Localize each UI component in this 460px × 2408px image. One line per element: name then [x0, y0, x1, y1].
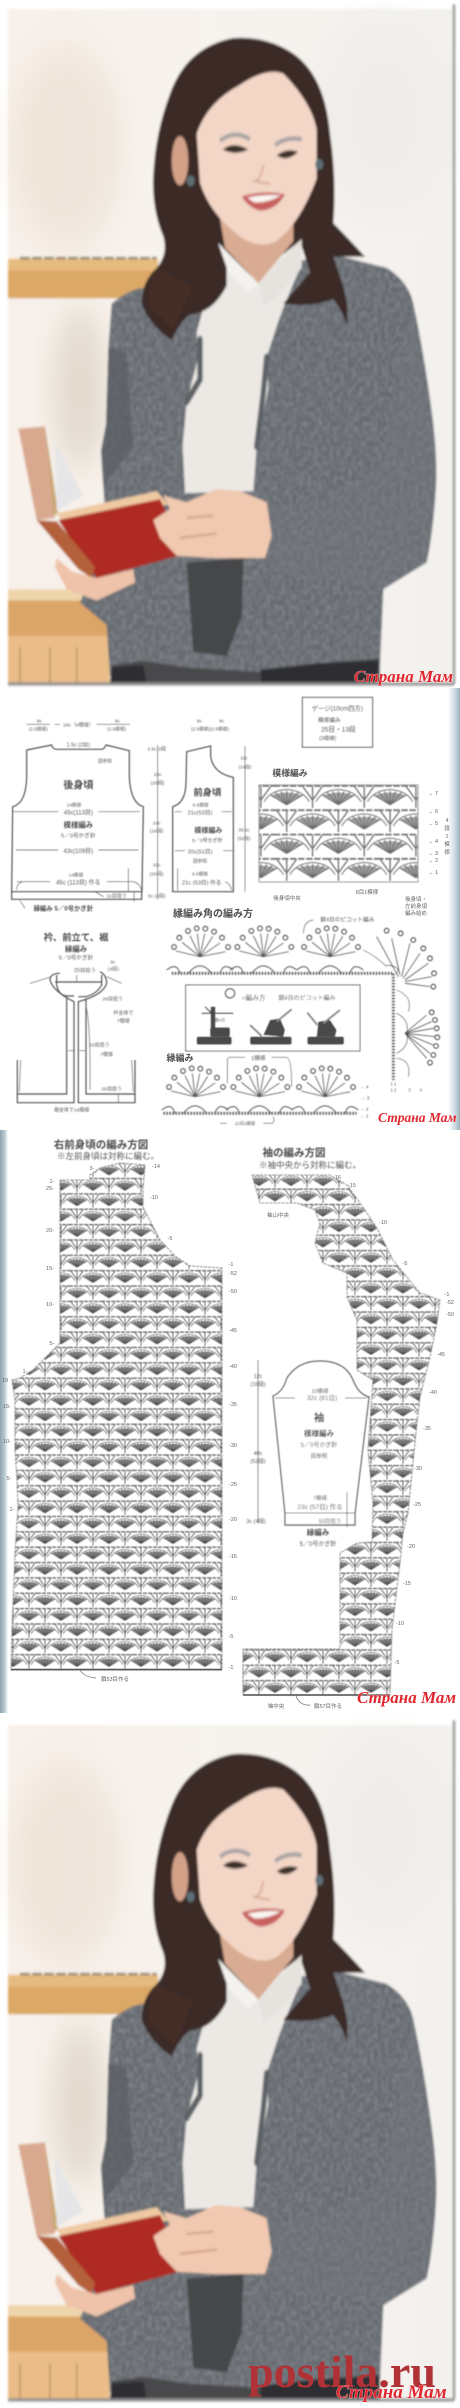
schematic: back body piece: (2.5模様): [29, 726, 48, 733]
stitch chart: edging: 1模様: [251, 1054, 266, 1062]
row numbers: right front body: -5: [168, 1236, 172, 1242]
stitch chart: pattern stitch sample: 様: [444, 848, 450, 856]
schematic: front body piece: 図参照: [193, 857, 207, 864]
stitch chart: edging corner: [167, 916, 440, 1092]
schematic: sleeve: (52段): [250, 1457, 266, 1465]
dimension column: front height: 11c: [240, 755, 248, 760]
watermark: postila logo: postila.ru: [248, 2346, 436, 2397]
schematic: sleeve: 縁編み: [307, 1527, 330, 1537]
schematic: back body piece: 19c（6模様）: [63, 722, 94, 729]
dimension column: front height: 39.5c: [238, 828, 250, 833]
gauge box: ゲージ(10cm四方): [312, 704, 363, 713]
stitch chart: edging corner: 3: [408, 1087, 411, 1092]
dimension column: body height: 2.5c 3段: [147, 746, 166, 753]
gauge box: (3模様): [319, 734, 336, 742]
stitch chart: pattern stitch sample: 後身頃・: [405, 895, 427, 903]
schematic: sleeve: 32c (81目): [307, 1394, 337, 1402]
schematic: front body piece: 8c: [197, 719, 202, 724]
heading: sleeve chart: 袖の編み方図: [262, 1146, 326, 1159]
row numbers: right front body: 10-: [46, 1302, 54, 1308]
stitch chart: pattern stitch sample: 編み始め: [405, 909, 427, 917]
schematic: back body piece: 45c(113目): [64, 809, 93, 816]
schematic: sleeve: 図参照: [311, 1452, 328, 1460]
row numbers: right front body: 5-: [50, 1341, 55, 1347]
schematic: back body piece: 11目拾う: [107, 893, 127, 900]
row numbers: right front body: 20-: [46, 1228, 54, 1234]
schematic: front body piece: [173, 719, 233, 892]
schematic: collar, front band and hem: 衿、前立て、裾: [44, 932, 109, 943]
stitch chart: sleeve: [243, 1175, 454, 1710]
stitch chart: pattern stitch sample: → 1: [428, 870, 438, 876]
schematic: collar, front band and hem: 29目拾う: [102, 996, 123, 1003]
row numbers: right front body: 25-: [46, 1186, 54, 1192]
stitch chart: pattern stitch sample: 段: [444, 824, 450, 832]
schematic: sleeve: [246, 1360, 369, 1548]
row numbers: sleeve: -10: [396, 1621, 404, 1627]
dimension column: front height: [238, 746, 252, 892]
row numbers: sleeve: -15: [348, 1183, 356, 1189]
row numbers: sleeve: -5: [403, 1261, 407, 1267]
icon: hook step one: [197, 1007, 233, 1045]
schematic: collar, front band and hem: 裾全体で18模様: [54, 1106, 89, 1113]
stitch chart: pattern stitch sample: → 4: [428, 839, 438, 845]
legend box: picot how-to: =編み方: [242, 993, 266, 1002]
dimension column: body height: 19c: [154, 772, 162, 778]
dimension column: front height: (52段): [238, 835, 251, 842]
stitch chart: edging corner: 鎖4目のピコット編み: [320, 916, 375, 924]
schematic: back body piece: 後身頃: [63, 778, 93, 791]
dimension column: body height: 15c: [153, 863, 161, 869]
schematic: sleeve: 23c (57目) 作る: [297, 1502, 343, 1511]
row numbers: right front body: -30: [229, 1443, 237, 1449]
row numbers: right front body: 5-: [7, 1476, 12, 1482]
schematic: front body piece: 前身頃: [193, 787, 222, 798]
stitch chart: sleeve: 袖山中央: [267, 1211, 289, 1219]
stitch chart: pattern stitch sample: → 7: [428, 791, 438, 797]
dimension column: body height: (20段): [150, 870, 164, 877]
stitch chart: edging: [162, 1054, 370, 1127]
stitch chart: edging corner: 4: [419, 1087, 422, 1092]
schematic: back body piece: 14模様: [69, 872, 84, 879]
row numbers: sleeve: -30: [414, 1466, 422, 1472]
schematic: back body piece: 14模様: [67, 802, 82, 809]
schematic: collar, front band and hem: 25目拾う: [101, 1085, 122, 1092]
dimension column: body height: (18段): [150, 828, 164, 835]
stitch chart: pattern stitch sample: 後身頃中央: [273, 894, 301, 902]
dimension column: body height: [147, 745, 166, 899]
stitch chart: edging corner: 1 2: [390, 1087, 397, 1092]
schematic: collar, front band and hem: 7模様: [100, 1051, 113, 1058]
heading: edging corner: 縁編み角の編み方: [173, 907, 253, 920]
row numbers: right front body: -5: [229, 1634, 233, 1640]
schematic: collar, front band and hem: 3c: [110, 959, 116, 965]
stitch chart: edging: → 1: [359, 1113, 369, 1119]
row numbers: sleeve: -15: [403, 1581, 411, 1587]
schematic: front body piece: 6.5模様: [193, 802, 209, 809]
photo: woman in grey crochet jacket reading a book: [8, 4, 454, 684]
schematic: collar, front band and hem: 25目拾う: [74, 966, 96, 974]
schematic: back body piece: 43c(109目): [64, 848, 93, 855]
heading: right front chart: [54, 1138, 159, 1161]
schematic: sleeve: 10模様: [311, 1387, 329, 1395]
stitch chart: sleeve: 鎖57目作る: [314, 1702, 342, 1710]
stitch chart: pattern stitch sample: 8目1模様: [356, 888, 379, 896]
schematic: front body piece: 21c (53目) 作る: [182, 879, 221, 887]
schematic: back body piece: 1.5c (2目): [67, 742, 90, 749]
icon: hook step three: [307, 1010, 344, 1045]
row numbers: sleeve: -1: [445, 1292, 449, 1298]
side shadow: left page edge: [0, 1130, 8, 1713]
row numbers: right front body: [2, 1164, 237, 1671]
row numbers: right front body: -25: [229, 1482, 237, 1488]
dimension column: body height: (25段): [151, 780, 165, 787]
stitch chart: pattern stitch sample: 左前身頃: [405, 902, 427, 910]
heading: right front chart: 右前身頃の編み方図: [54, 1138, 148, 1151]
row numbers: right front body: -14: [152, 1164, 160, 1170]
schematic: sleeve: 袖: [314, 1411, 324, 1424]
icon: hook step two: [250, 1009, 292, 1045]
schematic: back body piece: 図参照: [98, 758, 112, 765]
schematic: sleeve: 5／0号かぎ針: [301, 1441, 337, 1449]
row numbers: sleeve: -16: [333, 1175, 341, 1181]
stitch chart: edging: → 3: [360, 1095, 370, 1101]
row numbers: sleeve: -50: [446, 1312, 454, 1318]
schematic: collar, front band and hem: [17, 932, 135, 1113]
row numbers: right front body: -40: [229, 1364, 237, 1370]
stitch chart: pattern stitch sample: [259, 785, 450, 917]
schematic: front body piece: 6.5模様: [192, 870, 208, 877]
row numbers: sleeve: -5: [395, 1660, 399, 1666]
row numbers: right front body: -35: [229, 1402, 237, 1408]
row numbers: sleeve: -25: [413, 1502, 421, 1508]
row numbers: sleeve: -20: [407, 1544, 415, 1550]
stitch chart: sleeve: 袖中央: [268, 1702, 285, 1710]
schematic: collar, front band and hem: 縁編み: [65, 944, 88, 953]
row numbers: right front body: -10: [150, 1195, 158, 1201]
heading: pattern stitch: 模様編み: [272, 767, 308, 778]
watermark: diagram page: Страна Мам: [378, 1110, 457, 1125]
row numbers: right front body: -52: [229, 1271, 237, 1277]
watermark: top photo: Страна Мам: [354, 667, 453, 686]
gauge box: 25目・13段: [321, 724, 356, 733]
dimension column: body height: 14c: [153, 821, 161, 827]
stitch chart: pattern stitch sample: → 3: [428, 851, 438, 857]
stitch chart: pattern stitch sample: 1: [445, 834, 449, 840]
schematic: sleeve: 40c: [254, 1451, 263, 1457]
legend box: picot how-to: 鎖4目: [215, 1016, 225, 1022]
schematic: front body piece: 20c(51目): [188, 848, 213, 855]
row numbers: right front body: -45: [229, 1328, 237, 1334]
schematic: back body piece: 縁編み 5／0号かぎ針: [34, 904, 94, 913]
schematic: front body piece: 5／0号かぎ針: [192, 837, 223, 844]
stitch chart: edging: → 4: [359, 1084, 369, 1090]
schematic: back body piece: 模様編み: [64, 820, 94, 829]
schematic: collar, front band and hem: 5／0号かぎ針: [59, 953, 94, 961]
schematic: sleeve: 3c (4段): [246, 1517, 266, 1525]
stitch chart: edging: 12目1模様: [235, 1120, 256, 1127]
schematic: front body piece: 模様編み: [194, 825, 222, 834]
schematic: front body piece: 21c(53目): [188, 809, 213, 816]
side shadow: right page edge: [448, 688, 460, 1130]
row numbers: right front body: 19: [2, 1378, 8, 1384]
schematic: front body piece: 8c: [219, 719, 225, 724]
row numbers: right front body: 15-: [46, 1266, 54, 1272]
stitch chart: edging corner: 1 1: [390, 1082, 397, 1087]
watermark: bottom photo: Страна Мам: [336, 2382, 447, 2403]
schematic: sleeve: 7模様: [313, 1494, 328, 1502]
schematic: collar, front band and hem: 衿全体で: [113, 1009, 133, 1016]
schematic: sleeve: 5／0号かぎ針: [300, 1540, 336, 1548]
schematic: back body piece: [12, 719, 143, 913]
row numbers: sleeve: -35: [423, 1426, 431, 1432]
row numbers: right front body: -15: [229, 1554, 237, 1560]
row numbers: right front body: 10-: [3, 1439, 11, 1445]
schematic: back body piece: 5／0号かぎ針: [61, 832, 96, 840]
schematic: sleeve: 12c: [254, 1374, 263, 1380]
row numbers: sleeve: -40: [429, 1390, 437, 1396]
row numbers: right front body: 15-: [3, 1404, 11, 1410]
schematic: sleeve: (16段): [250, 1380, 266, 1388]
schematic: back body piece: 45c (113目) 作る: [56, 878, 101, 886]
row numbers: sleeve: -52: [446, 1300, 454, 1306]
stitch chart: pattern stitch sample: → 6: [428, 809, 438, 815]
legend box: picot how-to: 鎖4目のピコット編み: [278, 994, 336, 1002]
schematic: collar, front band and hem: 83目拾う: [89, 1042, 110, 1049]
gauge box: [302, 697, 373, 747]
row numbers: right front body: 1-: [50, 1179, 55, 1185]
row numbers: right front body: -10: [229, 1596, 237, 1602]
row numbers: right front body: -20: [229, 1517, 237, 1523]
schematic: collar, front band and hem: 7模様: [117, 1018, 130, 1025]
stitch chart: pattern stitch sample: → 2: [428, 858, 438, 864]
schematic: collar, front band and hem: (4段): [108, 966, 119, 973]
row numbers: sleeve: -45: [437, 1352, 445, 1358]
row numbers: sleeve: [333, 1175, 454, 1666]
schematic: back body piece: (2.5模様): [107, 726, 127, 733]
row numbers: right front body: -1: [229, 1665, 233, 1671]
row numbers: right front body: 1-: [10, 1507, 15, 1513]
row numbers: right front body: 1-: [23, 1369, 28, 1375]
schematic: sleeve: 模様編み: [304, 1428, 334, 1438]
row numbers: right front body: 3-: [90, 1166, 95, 1172]
row numbers: right front body: -50: [229, 1289, 237, 1295]
stitch chart: right front body: [2, 1163, 237, 1683]
stitch chart: pattern stitch sample: → 5: [428, 821, 438, 827]
row numbers: sleeve: -10: [379, 1220, 387, 1226]
heading: edging: 縁編み: [166, 1052, 194, 1063]
stitch chart: pattern stitch sample: 4: [445, 818, 449, 824]
legend box: picot how-to: [186, 985, 360, 1051]
schematic: sleeve: 50目拾う: [319, 1517, 341, 1525]
photo: repeat of woman in grey crochet jacket: [8, 1720, 454, 2400]
stitch chart: right front body: 鎖53目作る: [101, 1675, 129, 1683]
row numbers: right front body: -1: [229, 1262, 233, 1268]
note: left front symmetric: ※左前身頃は対称に編む。: [57, 1151, 159, 1161]
schematic: front body piece: (2.5模様)(2.5模様): [191, 726, 229, 733]
stitch chart: pattern stitch sample: 模: [444, 840, 450, 848]
schematic: back body piece: 8c: [115, 719, 120, 724]
stitch chart: edging: → 2: [359, 1107, 369, 1113]
schematic: back body piece: 8c: [37, 719, 42, 724]
dimension column: front height: (14段): [239, 763, 252, 770]
note: sleeve symmetric: ※袖中央から対称に編む。: [259, 1160, 361, 1170]
heading: sleeve chart: [259, 1146, 361, 1170]
gauge box: 模様編み: [318, 716, 341, 724]
watermark: charts page: Страна Мам: [357, 1688, 456, 1707]
dimension column: body height: 3c (4段): [148, 892, 166, 899]
